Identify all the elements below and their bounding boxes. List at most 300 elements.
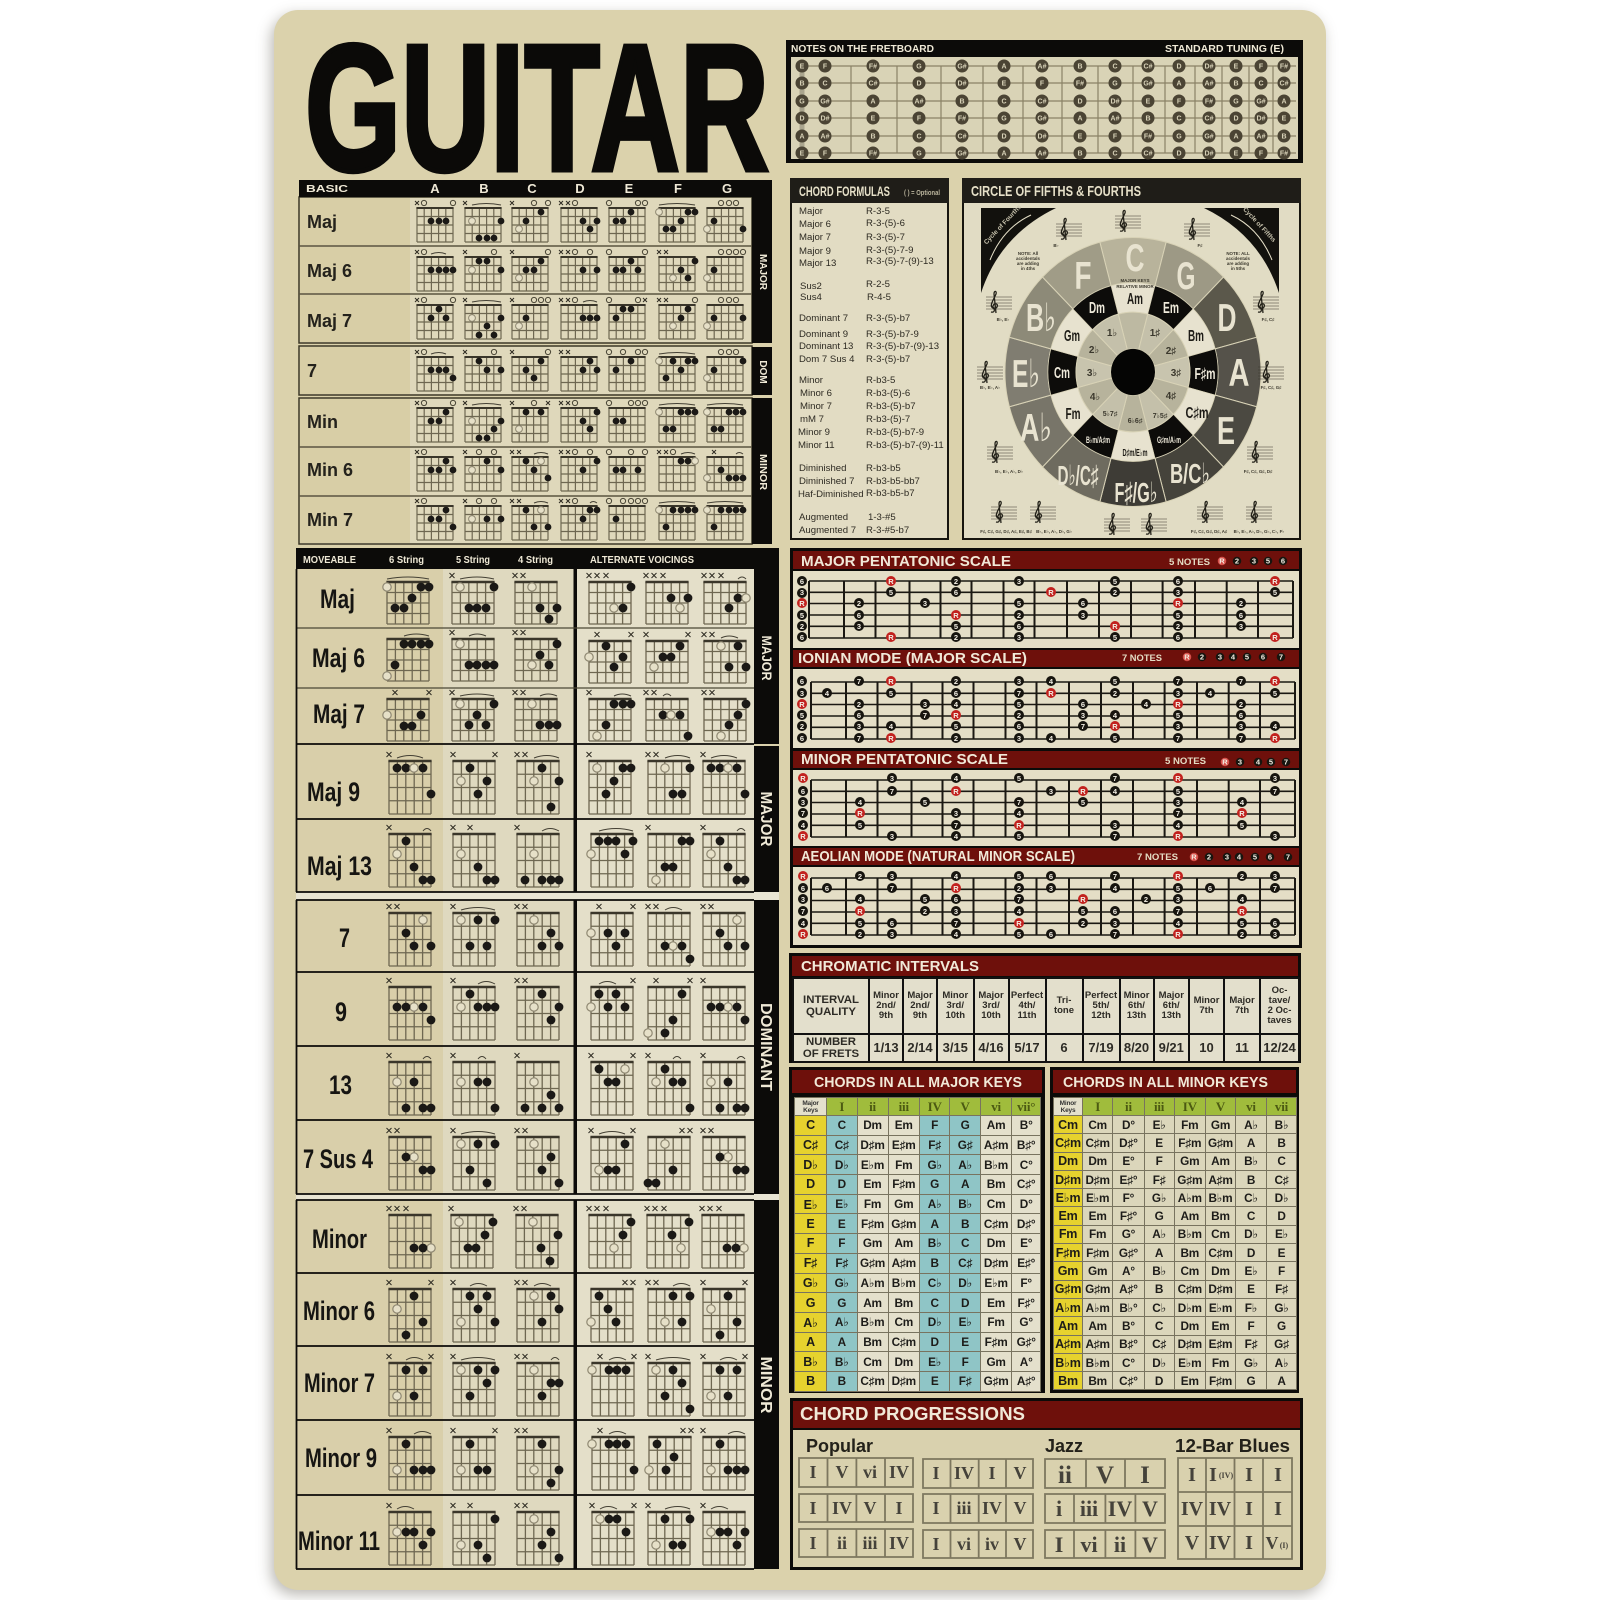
progressions: jazz: I bbox=[1055, 1532, 1063, 1557]
formula list: R-b3-(5)-6 bbox=[866, 388, 910, 399]
key signature staves: F♯, C♯, G♯, D♯ bbox=[1244, 469, 1273, 474]
formula list: R-3-(5)-b7-9 bbox=[866, 329, 919, 340]
table: chords in all minor keys: G♯m bbox=[1085, 1282, 1110, 1296]
panel: notes on the fretboard: F bbox=[1259, 150, 1264, 158]
column headings bbox=[430, 181, 732, 196]
note: fourths: in 4ths bbox=[1021, 266, 1036, 271]
table: chords in all minor keys: F bbox=[1247, 1319, 1254, 1333]
chord: Maj C bbox=[510, 200, 551, 242]
table: chords in all minor keys: B♯° bbox=[1119, 1337, 1138, 1351]
table: chords in all major keys: F♯ bbox=[928, 1138, 941, 1152]
table: chords in all major keys: G bbox=[930, 1177, 939, 1191]
panel: moveable chords bbox=[296, 548, 779, 1569]
panel: notes on the fretboard: D bbox=[1176, 64, 1182, 70]
panel: notes on the fretboard: D# bbox=[1257, 116, 1266, 122]
table: chords in all major keys: B♭ bbox=[835, 1355, 849, 1369]
progressions: popular column 2: V bbox=[1014, 1463, 1026, 1483]
table: chromatic intervals: 10 bbox=[1199, 1040, 1214, 1055]
table: chords in all minor keys: B bbox=[1247, 1173, 1255, 1187]
chord: Min 7 G bbox=[704, 502, 744, 540]
panel: notes on the fretboard: C bbox=[1001, 98, 1007, 106]
chord: moveable Maj 7 6-string bbox=[383, 690, 432, 741]
chord: moveable Minor 11 alt 1 bbox=[590, 1503, 636, 1565]
table: chords in all major keys: Bm bbox=[894, 1296, 913, 1310]
table: chords in all minor keys: B♭m bbox=[1178, 1227, 1202, 1241]
table: chords in all minor keys: F♯m bbox=[1086, 1246, 1109, 1260]
major key letters: F bbox=[1074, 255, 1092, 298]
minor key letters: B♭m/A♯m bbox=[1086, 435, 1110, 445]
chord: moveable Minor 6 5-string bbox=[450, 1280, 496, 1342]
table: chords in all major keys: G bbox=[806, 1296, 815, 1310]
panel: notes on the fretboard: B bbox=[1233, 80, 1239, 88]
table: chromatic intervals: 2/14 bbox=[907, 1040, 933, 1055]
column headings: F bbox=[674, 181, 682, 196]
heading: chords in all minor keys: CHORDS IN ALL MINOR KEYS bbox=[1063, 1074, 1268, 1091]
table: chords in all minor keys: A♭m bbox=[1086, 1301, 1110, 1315]
note: optional: ( ) = Optional bbox=[904, 190, 940, 197]
table: chords in all minor keys: Dm bbox=[1088, 1154, 1107, 1168]
progressions: 12-bar blues bbox=[1178, 1458, 1292, 1559]
panel: notes on the fretboard: E bbox=[871, 116, 876, 122]
progressions: popular column 1 bbox=[799, 1458, 913, 1557]
table: chords in all minor keys bbox=[1053, 1097, 1297, 1390]
chord: moveable Maj 9 4-string bbox=[514, 752, 560, 814]
panel: notes on the fretboard: C# bbox=[1144, 150, 1153, 158]
progressions: 12-bar blues: I bbox=[1274, 1498, 1282, 1520]
table: chords in all major keys: vi bbox=[991, 1098, 1001, 1114]
side labels: DOMINANT bbox=[757, 1003, 774, 1091]
key signature staves bbox=[977, 210, 1284, 535]
table: chords in all minor keys: D♯m bbox=[1208, 1282, 1233, 1296]
accidental counts: 6♭6♯ bbox=[1128, 417, 1143, 425]
panel: notes on the fretboard: F# bbox=[1144, 134, 1152, 140]
table: chromatic intervals: 2nd/ bbox=[910, 1000, 930, 1011]
panel: notes on the fretboard: G bbox=[916, 150, 922, 158]
table: chords in all minor keys: F♯m bbox=[1056, 1246, 1080, 1260]
formula list: Augmented bbox=[799, 512, 848, 523]
side labels: MINOR bbox=[757, 1357, 774, 1414]
table: chords in all minor keys: B♭° bbox=[1119, 1301, 1138, 1315]
key signature staves: F♯, C♯, G♯, D♯, A♯ bbox=[1191, 529, 1228, 534]
panel: notes on the fretboard: F bbox=[917, 116, 922, 122]
panel: notes on the fretboard: E bbox=[1146, 98, 1151, 106]
table: chromatic intervals: Major bbox=[907, 990, 933, 1001]
chord: Min 6 D bbox=[559, 449, 598, 491]
panel: notes on the fretboard: C# bbox=[1205, 116, 1214, 122]
progressions: popular column 1: ii bbox=[837, 1533, 847, 1553]
table: chords in all minor keys: F° bbox=[1123, 1191, 1134, 1205]
major key letters: F♯/G♭ bbox=[1114, 477, 1158, 508]
panel: notes on the fretboard: E bbox=[1002, 80, 1007, 88]
panel: notes on the fretboard: E bbox=[1078, 134, 1083, 140]
row labels: 9 bbox=[335, 997, 347, 1027]
panel: notes on the fretboard: A bbox=[799, 134, 805, 140]
legend: 7 notes: R234567 bbox=[1184, 652, 1283, 662]
chord: Min E bbox=[606, 400, 648, 442]
row labels: Maj 9 bbox=[307, 777, 360, 807]
table: chords in all minor keys: D♯° bbox=[1119, 1136, 1138, 1150]
formula list: R-3-(5)-7 bbox=[866, 232, 905, 243]
table: chromatic intervals: 3/15 bbox=[943, 1040, 968, 1055]
formula list: R-b3-b5-bb7 bbox=[866, 476, 920, 487]
panel: notes on the fretboard: B bbox=[1281, 134, 1287, 140]
table: chords in all minor keys: G♯ bbox=[1274, 1337, 1289, 1351]
table: chords in all major keys: Am bbox=[894, 1236, 913, 1250]
table: chords in all major keys: G° bbox=[1019, 1315, 1033, 1329]
heading: major pentatonic scale: MAJOR PENTATONIC SCALE bbox=[801, 553, 1011, 570]
table: chords in all minor keys: Cm bbox=[1180, 1264, 1199, 1278]
table: chords in all major keys: D♭ bbox=[803, 1158, 818, 1172]
table: chords in all minor keys: Bm bbox=[1058, 1374, 1078, 1388]
progressions: popular column 1: V bbox=[864, 1498, 876, 1518]
scale: aeolian mode: R234567R23 bbox=[800, 872, 1277, 881]
table: chords in all major keys: Em bbox=[895, 1118, 913, 1132]
table: chords in all major keys: vii° bbox=[1017, 1098, 1035, 1114]
row labels: Minor 11 bbox=[298, 1526, 380, 1556]
table: chromatic intervals: 4/16 bbox=[978, 1040, 1004, 1055]
chord: 7 E bbox=[606, 349, 648, 391]
table: chords in all minor keys: A♯m bbox=[1085, 1337, 1110, 1351]
table: chords in all major keys: D bbox=[961, 1296, 969, 1310]
key signature staves: F♯ bbox=[1198, 243, 1203, 248]
chord: Maj 7 D bbox=[559, 297, 598, 339]
panel: notes on the fretboard: B bbox=[799, 80, 805, 88]
note: fourths bbox=[1016, 251, 1041, 271]
chord: moveable 7 Sus 4 6-string bbox=[386, 1128, 432, 1190]
table: chords in all major keys: B♭ bbox=[958, 1197, 972, 1211]
chord: moveable 7 6-string bbox=[386, 904, 432, 966]
table: chords in all minor keys: G° bbox=[1122, 1227, 1135, 1241]
heading: notes on the fretboard: NOTES ON THE FRETBOARD bbox=[791, 44, 934, 55]
minor key letters: Cm bbox=[1054, 365, 1070, 382]
formula list: Minor 9 bbox=[798, 427, 830, 438]
progressions: jazz: iii bbox=[1080, 1496, 1098, 1521]
chord: 7 C bbox=[510, 349, 551, 391]
formula list: Dom 7 Sus 4 bbox=[799, 354, 855, 365]
table: chords in all major keys bbox=[794, 1097, 1041, 1392]
row labels: 7 bbox=[339, 923, 350, 953]
key signature staves: B♭, E♭, A♭ bbox=[980, 385, 1000, 390]
formula list: R-b3-(5)-b7-(9)-11 bbox=[866, 440, 944, 451]
table: chords in all minor keys: E♯m bbox=[1209, 1337, 1232, 1351]
accidental counts bbox=[1087, 328, 1181, 425]
panel: notes on the fretboard: A# bbox=[1038, 64, 1047, 70]
table: chords in all major keys: G♯° bbox=[1017, 1335, 1036, 1349]
table: chords in all minor keys: C♯m bbox=[1085, 1136, 1110, 1150]
formula list: Major 6 bbox=[799, 219, 831, 230]
progressions: popular column 2: IV bbox=[982, 1498, 1002, 1518]
table: chords in all minor keys: Am bbox=[1180, 1209, 1199, 1223]
chord: moveable Maj 13 6-string bbox=[386, 825, 432, 887]
table: chords in all minor keys: C♯m bbox=[1208, 1246, 1233, 1260]
table: chords in all minor keys: A♭m bbox=[1178, 1191, 1202, 1205]
table: chords in all major keys: D bbox=[838, 1177, 846, 1191]
scale: aeolian mode: 4567R23456 bbox=[801, 919, 1277, 928]
table: chords in all minor keys: Bm bbox=[1180, 1246, 1199, 1260]
progressions: popular column 2: I bbox=[988, 1463, 996, 1483]
table: chromatic intervals: Minor bbox=[942, 990, 968, 1001]
major key letters: E bbox=[1217, 410, 1235, 453]
table: chords in all major keys: E bbox=[931, 1374, 938, 1388]
table: chromatic intervals: 13th bbox=[1161, 1010, 1181, 1021]
panel: notes on the fretboard: A bbox=[870, 98, 876, 106]
accidental counts: 2♯ bbox=[1166, 346, 1176, 357]
table: chromatic intervals: Major bbox=[978, 990, 1004, 1001]
chord: Maj E bbox=[606, 200, 648, 242]
table: chords in all major keys: C♭ bbox=[928, 1276, 941, 1290]
progressions: jazz: vi bbox=[1080, 1532, 1098, 1557]
side labels: MAJOR bbox=[757, 792, 774, 847]
panel: notes on the fretboard: D bbox=[916, 80, 922, 88]
panel: notes on the fretboard: G bbox=[1001, 116, 1007, 122]
table: chords in all minor keys: A♯° bbox=[1119, 1282, 1138, 1296]
table: chromatic intervals: 7/19 bbox=[1088, 1040, 1114, 1055]
chord: moveable 7 alt 3 bbox=[700, 904, 746, 966]
chord: Maj G bbox=[704, 200, 744, 242]
scale: minor pentatonic: 457R345 bbox=[801, 821, 1244, 830]
heading: jazz: Jazz bbox=[1045, 1436, 1083, 1456]
chord: moveable 7 Sus 4 5-string bbox=[450, 1128, 496, 1190]
minor key letters: Dm bbox=[1089, 300, 1105, 317]
panel: notes on the fretboard: G bbox=[1176, 134, 1182, 140]
table: chords in all minor keys: A bbox=[1247, 1136, 1255, 1150]
panel: notes on the fretboard: A# bbox=[915, 98, 924, 106]
table: chords in all minor keys: E♭m bbox=[1086, 1191, 1109, 1205]
table: chords in all major keys: F° bbox=[1020, 1276, 1032, 1290]
panel: notes on the fretboard: E bbox=[800, 150, 805, 158]
progressions: popular column 1: IV bbox=[889, 1533, 909, 1553]
chord: 7 B bbox=[463, 349, 502, 391]
chord: moveable 13 alt 2 bbox=[646, 1053, 691, 1115]
note: fifths: in 5ths bbox=[1231, 266, 1246, 271]
scale: minor pentatonic: R3457R3 bbox=[800, 832, 1277, 841]
chord: moveable Minor 9 4-string bbox=[514, 1428, 560, 1490]
panel: notes on the fretboard: A bbox=[1233, 134, 1239, 140]
table: chords in all major keys: Gm bbox=[986, 1355, 1006, 1369]
table: chords in all major keys: C bbox=[838, 1118, 846, 1132]
table: chords in all major keys: E° bbox=[1020, 1236, 1032, 1250]
major key letters: G bbox=[1176, 255, 1196, 298]
chord: Maj A bbox=[415, 200, 456, 242]
panel: notes on the fretboard: E bbox=[800, 64, 805, 70]
column headings: B bbox=[479, 181, 489, 196]
formula list: Major 7 bbox=[799, 232, 831, 243]
table: chords in all minor keys: V bbox=[1216, 1098, 1225, 1114]
formula list: Diminished bbox=[799, 463, 846, 474]
table: chords in all major keys: C♯m bbox=[984, 1217, 1008, 1231]
formula list: R-4-5 bbox=[867, 292, 891, 303]
column headings: C bbox=[527, 181, 537, 196]
table: chords in all minor keys: Bm bbox=[1211, 1209, 1230, 1223]
panel: notes on the fretboard: B bbox=[1077, 64, 1083, 70]
accidental counts: 7♭5♯ bbox=[1153, 412, 1168, 420]
panel: notes on the fretboard: F# bbox=[1076, 80, 1084, 88]
progressions: popular column 2: V bbox=[1014, 1498, 1026, 1518]
table: chords in all minor keys: F♯° bbox=[1120, 1209, 1137, 1223]
table: chords in all minor keys: Keys bbox=[1061, 1106, 1075, 1114]
table: chords in all minor keys: Dm bbox=[1058, 1154, 1078, 1168]
table: chords in all major keys: A♭ bbox=[958, 1158, 972, 1172]
table: chords in all major keys: A bbox=[930, 1217, 939, 1231]
chord: moveable Minor 5-string bbox=[448, 1206, 494, 1268]
table: chords in all minor keys: A♯m bbox=[1208, 1173, 1233, 1187]
note: fifths bbox=[1226, 251, 1251, 271]
panel: notes on the fretboard: C bbox=[916, 134, 922, 140]
key signature staves: F♯, C♯, G♯ bbox=[1261, 385, 1282, 390]
table: chords in all major keys: C♯ bbox=[835, 1138, 849, 1152]
panel: notes on the fretboard: D# bbox=[1038, 134, 1047, 140]
chord: moveable Minor 11 4-string bbox=[514, 1503, 560, 1565]
formula list: R-3-(5)-b7 bbox=[866, 313, 910, 324]
table: chords in all major keys: B bbox=[806, 1374, 815, 1388]
table: chords in all minor keys: E♭ bbox=[1244, 1264, 1258, 1278]
table: chords in all major keys: E♭ bbox=[804, 1198, 817, 1212]
panel: notes on the fretboard: F# bbox=[869, 64, 877, 70]
progressions: 12-bar blues: I bbox=[1274, 1464, 1282, 1486]
table: chords in all major keys: E♭ bbox=[959, 1315, 972, 1329]
table: chords in all major keys: F bbox=[962, 1355, 969, 1369]
table: chords in all major keys: E bbox=[806, 1217, 815, 1231]
table: chords in all major keys: B♭m bbox=[892, 1276, 916, 1290]
minor key letters: Fm bbox=[1066, 406, 1080, 423]
table: chromatic intervals: NUMBER bbox=[806, 1036, 856, 1048]
formula list: Dominant 7 bbox=[799, 313, 848, 324]
row labels: Maj 7 bbox=[307, 311, 352, 331]
formula list: Diminished 7 bbox=[799, 476, 854, 487]
chord: moveable 13 alt 3 bbox=[700, 1053, 746, 1115]
panel: notes on the fretboard: G# bbox=[957, 150, 967, 158]
chord: Maj 6 G bbox=[704, 249, 746, 291]
chord: moveable Maj 13 4-string bbox=[514, 825, 560, 887]
table: chromatic intervals: 5/17 bbox=[1014, 1040, 1040, 1055]
table: chords in all minor keys: Dm bbox=[1211, 1264, 1230, 1278]
progressions: jazz: i bbox=[1056, 1496, 1062, 1521]
table: chords in all major keys: Am bbox=[987, 1118, 1005, 1132]
panel: notes on the fretboard: D bbox=[1233, 116, 1239, 122]
scale: major pentatonic: 2356R23 bbox=[800, 622, 1243, 631]
progressions: jazz: ii bbox=[1114, 1532, 1126, 1557]
accidental counts: 5♭7♯ bbox=[1103, 410, 1118, 418]
chord: moveable Minor 9 6-string bbox=[386, 1428, 432, 1490]
table: chromatic intervals: Minor bbox=[1124, 990, 1149, 1001]
chord: moveable 13 alt 1 bbox=[588, 1053, 636, 1115]
panel: notes on the fretboard: A# bbox=[1257, 134, 1266, 140]
table: chords in all major keys: F♯m bbox=[892, 1177, 915, 1191]
table: chords in all minor keys: B bbox=[1155, 1282, 1163, 1296]
panel: notes on the fretboard: G# bbox=[1037, 116, 1047, 122]
table: chords in all minor keys: G♯m bbox=[1208, 1136, 1233, 1150]
table: chromatic intervals: tave/ bbox=[1269, 995, 1290, 1006]
column headings: G bbox=[722, 181, 732, 196]
formula list: R-3-5 bbox=[866, 206, 890, 217]
table: chromatic intervals: OF FRETS bbox=[803, 1048, 859, 1060]
minor key letters bbox=[1054, 278, 1216, 459]
table: chords in all major keys: D bbox=[806, 1177, 815, 1191]
table: chords in all minor keys: E bbox=[1155, 1136, 1163, 1150]
chord: moveable Minor 9 alt 3 bbox=[700, 1428, 746, 1490]
panel: notes on the fretboard: F# bbox=[958, 116, 966, 122]
row labels: Minor 9 bbox=[305, 1443, 377, 1473]
table: chords in all minor keys: Fm bbox=[1089, 1227, 1106, 1241]
key signature staves: B♭, E♭, A♭, D♭, G♭ bbox=[1036, 529, 1072, 534]
progressions: popular column 2: vi bbox=[957, 1534, 971, 1554]
row labels bbox=[307, 212, 353, 530]
scale: ionian mode: 67R234577R bbox=[800, 677, 1278, 686]
panel: minor keys header bbox=[1050, 1067, 1299, 1393]
chord: moveable Minor 4-string bbox=[514, 1206, 559, 1268]
panel: notes on the fretboard: A# bbox=[1038, 150, 1047, 158]
table: chords in all minor keys: A bbox=[1277, 1374, 1286, 1388]
chord: Maj 7 C bbox=[510, 297, 551, 339]
scale: major pentatonic bbox=[799, 553, 1293, 642]
formula list: Minor 11 bbox=[798, 440, 835, 451]
table: chords in all major keys: G♭ bbox=[927, 1158, 942, 1172]
table: chords in all minor keys: Em bbox=[1212, 1319, 1229, 1333]
panel: notes on the fretboard: A bbox=[1281, 98, 1287, 106]
corner: cycle of fourths: Cycle of Fourths bbox=[983, 204, 1023, 246]
table: chords in all minor keys: C♯° bbox=[1119, 1374, 1138, 1388]
table: chords in all major keys: B♯° bbox=[1017, 1138, 1035, 1152]
panel: notes on the fretboard: F# bbox=[869, 150, 877, 158]
table: chromatic intervals bbox=[792, 977, 1300, 1063]
table: chords in all major keys: A bbox=[838, 1335, 846, 1349]
legend: 5 notes: 5 NOTES bbox=[1165, 756, 1206, 766]
chord: moveable 7 Sus 4 alt 1 bbox=[588, 1128, 636, 1190]
progressions: popular column 1: V bbox=[836, 1462, 848, 1482]
table: chords in all minor keys: E♭ bbox=[1275, 1227, 1288, 1241]
minor key letters: Bm bbox=[1188, 328, 1204, 345]
progressions: 12-bar blues: (IV) bbox=[1219, 1471, 1233, 1480]
heading: 12-bar blues: 12-Bar Blues bbox=[1175, 1436, 1290, 1456]
table: chords in all minor keys: A♭ bbox=[1275, 1356, 1288, 1370]
table: chords in all major keys: F♯° bbox=[1018, 1296, 1035, 1310]
key signature staves: B♭ bbox=[1053, 243, 1059, 248]
chord: moveable Maj 4-string bbox=[512, 573, 558, 624]
chord: moveable 13 5-string bbox=[450, 1053, 496, 1115]
chord: Maj 6 A bbox=[415, 249, 454, 291]
scale: ionian mode: 34567R2345 bbox=[800, 689, 1277, 698]
chord: Min F bbox=[656, 404, 696, 442]
wheel bbox=[1005, 238, 1261, 506]
panel: notes on the fretboard: B bbox=[870, 134, 876, 140]
panel: notes on the fretboard: D# bbox=[1111, 98, 1120, 106]
table: chords in all major keys: G♯m bbox=[891, 1217, 916, 1231]
chord: moveable Minor 7 6-string bbox=[386, 1354, 434, 1416]
heading: chords in all major keys: CHORDS IN ALL MAJOR KEYS bbox=[814, 1074, 1022, 1091]
table: chromatic intervals: Minor bbox=[1194, 995, 1219, 1006]
panel: notes on the fretboard: G# bbox=[1256, 98, 1266, 106]
row labels: Maj 13 bbox=[307, 851, 372, 881]
formula list: Dominant 9 bbox=[799, 329, 848, 340]
chord: moveable Maj 6 4-string bbox=[512, 630, 558, 681]
panel: notes on the fretboard: A bbox=[1176, 80, 1182, 88]
panel: notes on the fretboard: D# bbox=[958, 80, 967, 88]
chord: moveable Minor 9 5-string bbox=[450, 1428, 498, 1490]
panel: notes on the fretboard: G# bbox=[957, 64, 967, 70]
panel: notes on the fretboard: D# bbox=[821, 116, 830, 122]
table: chords in all major keys: D♯m bbox=[892, 1374, 916, 1388]
key signature staves: F♯, C♯, G♯, D♯, A♯, E♯, B♯ bbox=[980, 529, 1033, 534]
chord: Maj 6 D bbox=[559, 249, 598, 291]
progressions: popular column 1: I bbox=[809, 1498, 817, 1518]
progressions: 12-bar blues: I bbox=[1209, 1464, 1217, 1486]
table: chromatic intervals: INTERVAL bbox=[803, 994, 859, 1006]
table: chords in all major keys: C bbox=[961, 1236, 969, 1250]
chord: moveable Minor alt 3 bbox=[700, 1206, 748, 1268]
table: chords in all major keys: D♯m bbox=[860, 1138, 885, 1152]
chord: Min 6 A bbox=[415, 449, 454, 491]
panel: notes on the fretboard: F bbox=[1040, 80, 1045, 88]
